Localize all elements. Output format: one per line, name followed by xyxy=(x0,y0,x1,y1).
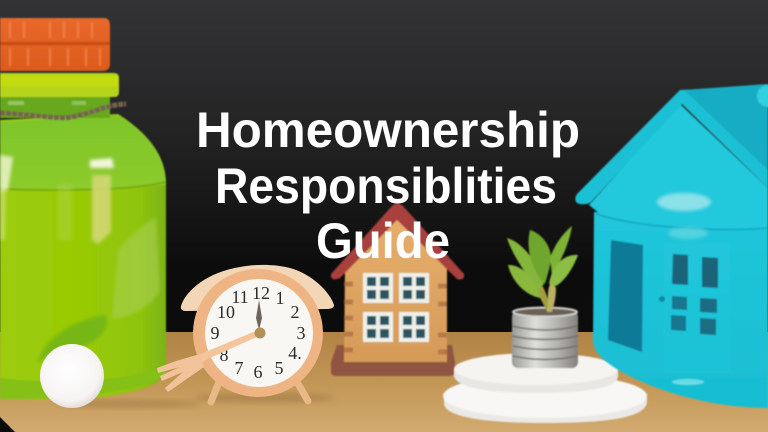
clock numerals: 1 xyxy=(276,288,284,308)
clock numerals: 6 xyxy=(254,362,262,382)
icon: green plant xyxy=(507,226,578,312)
teal walls xyxy=(593,212,768,408)
jar orange cap xyxy=(0,18,110,71)
clock numerals xyxy=(210,283,306,382)
teal highlights xyxy=(657,193,711,211)
house walls xyxy=(344,216,447,362)
jar reflections xyxy=(0,155,160,362)
icon: coin stack xyxy=(512,308,578,368)
teal roof xyxy=(575,84,768,204)
clock face xyxy=(205,279,313,387)
clock top bell xyxy=(181,265,334,311)
icon: white plates xyxy=(443,353,647,423)
house roof xyxy=(331,204,464,279)
jar collar xyxy=(0,73,119,97)
icon: white ball xyxy=(40,344,104,408)
clock numerals: 2 xyxy=(290,302,300,322)
teal side window xyxy=(608,240,643,352)
clock numerals: 7 xyxy=(234,358,244,378)
icon: green jar xyxy=(0,18,166,400)
dark background wall xyxy=(0,0,768,336)
teal gable xyxy=(589,104,768,228)
title xyxy=(196,102,580,269)
house plinth xyxy=(331,345,455,376)
title: Responsiblities xyxy=(215,158,557,214)
icon: teal house xyxy=(575,84,768,408)
clock numerals: 4. xyxy=(288,343,302,363)
clock numerals: 11 xyxy=(231,287,249,307)
clock numerals: 8 xyxy=(220,345,228,365)
clock numerals: 12 xyxy=(252,283,270,303)
jar rope xyxy=(0,104,126,118)
house log ends xyxy=(344,284,447,352)
clock rim xyxy=(193,269,323,397)
clock numerals: 3 xyxy=(296,323,306,343)
clock numerals: 10 xyxy=(217,302,235,322)
jar shoulder xyxy=(0,116,166,189)
jar body xyxy=(0,114,166,400)
clock hands and fork xyxy=(157,300,266,392)
clock legs xyxy=(211,382,308,402)
title: Guide xyxy=(316,213,450,269)
jar neck xyxy=(0,96,110,118)
title: Homeownership xyxy=(196,102,580,158)
icon: small wooden house xyxy=(331,204,464,376)
wooden table xyxy=(0,332,768,432)
teal door xyxy=(659,243,730,373)
clock numerals: 5 xyxy=(274,358,284,378)
house windows xyxy=(363,273,429,342)
clock numerals: 9 xyxy=(210,323,220,343)
icon: alarm clock xyxy=(157,265,334,402)
